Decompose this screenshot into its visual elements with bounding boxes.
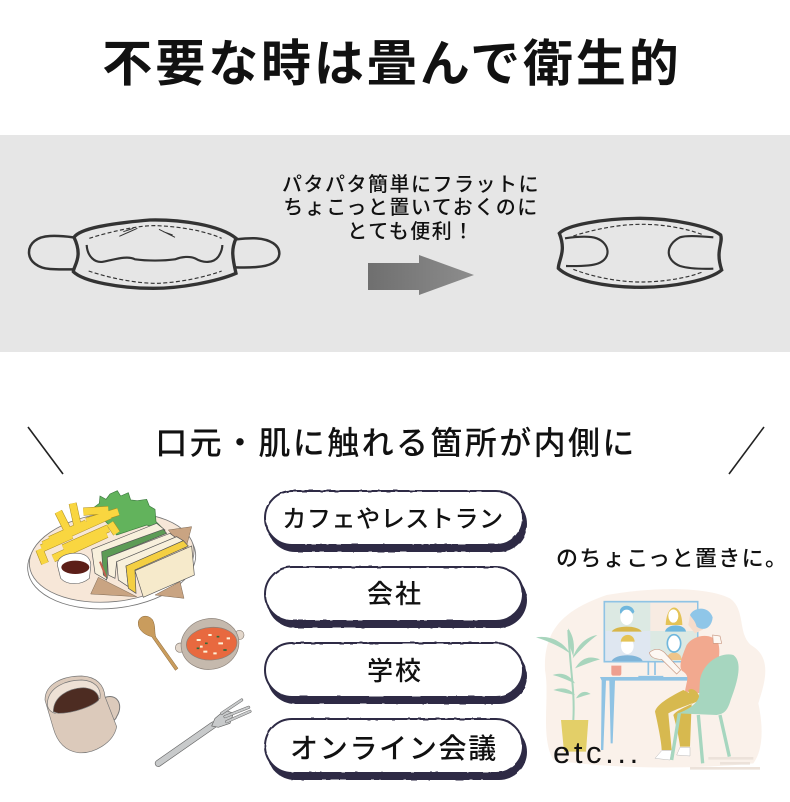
dip cup [57, 553, 91, 584]
left slash [28, 427, 63, 474]
right slash [729, 427, 764, 474]
sandwich [92, 523, 194, 597]
illustration: food [23, 491, 250, 763]
list: places [265, 491, 527, 780]
floor shadow [690, 758, 760, 768]
pill: online meeting: オンライン会議 [290, 733, 498, 764]
panel: folding steps [0, 135, 790, 352]
pill: school: 学校 [367, 656, 423, 686]
desk [600, 677, 690, 750]
pill: cafe [265, 491, 527, 552]
text: description: パタパタ簡単にフラットに [282, 173, 540, 196]
title: 不要な時は畳んで衛生的 [102, 36, 682, 92]
fork [158, 700, 250, 763]
etc label: etc... [553, 735, 642, 770]
heading: inner side: 口元・肌に触れる箇所が内側に [155, 425, 637, 461]
mug [45, 676, 120, 753]
pill: office: 会社 [367, 579, 423, 609]
plant [536, 628, 600, 752]
pill: cafe: カフェやレストラン [282, 506, 504, 533]
text: description [282, 173, 540, 243]
plate [23, 505, 200, 617]
chair [672, 654, 739, 763]
paper [91, 527, 192, 598]
icon: folded mask [558, 218, 722, 287]
fries [39, 503, 118, 563]
illustration: video call [536, 589, 765, 768]
handwritten caption: のちょこっと置きに。 [556, 546, 788, 571]
text: description: ちょこっと置いておくのに [283, 197, 539, 219]
arrow [368, 255, 474, 295]
lettuce [93, 491, 165, 535]
bowl [175, 614, 244, 674]
spoon [138, 616, 178, 670]
person [649, 609, 722, 760]
participants [612, 606, 686, 661]
monitor [604, 602, 698, 677]
mug on desk [611, 666, 621, 676]
icon: open mask [29, 220, 279, 288]
pill: online meeting [265, 719, 527, 780]
text: description: とても便利！ [347, 220, 475, 243]
background blob [545, 589, 765, 767]
pill: school [265, 643, 527, 704]
pill: office [265, 567, 527, 628]
